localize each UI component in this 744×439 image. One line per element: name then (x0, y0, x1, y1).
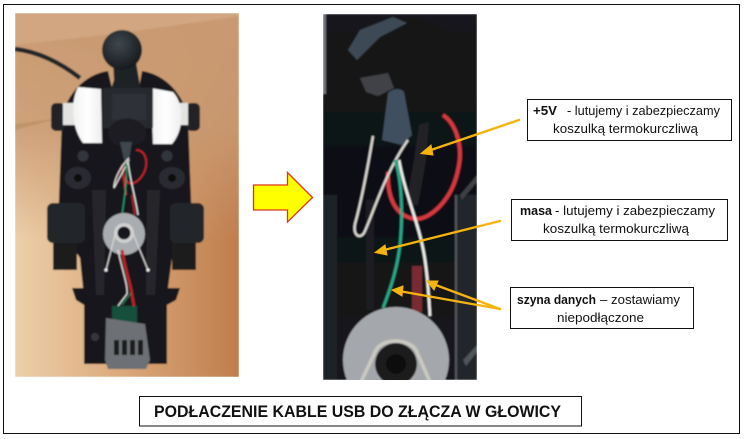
grey usb connector (105, 318, 150, 369)
label: +5V: - lutujemy i zabezpieczamy (567, 103, 720, 118)
photo: joystick head with wiring (15, 13, 239, 377)
label: masa: masa (520, 203, 553, 218)
label: masa: - lutujemy i zabezpieczamy (555, 203, 716, 218)
label: masa (512, 200, 728, 240)
title (140, 396, 582, 426)
annotation arrows (375, 120, 519, 309)
label: +5V (528, 100, 732, 140)
label: +5V: +5V (533, 103, 557, 118)
green wire (383, 160, 402, 308)
arrows to data lines (392, 281, 500, 309)
green circuit board (112, 306, 137, 323)
black heat-shrink tube (406, 122, 429, 205)
red sleeve (412, 266, 422, 312)
left white wire loop (355, 136, 408, 236)
washer with spring (342, 306, 450, 380)
coloured wires (114, 150, 146, 215)
wooden table background (15, 13, 239, 377)
red wire loop (388, 115, 460, 219)
label: szyna danych: – zostawiamy (600, 292, 681, 307)
wires to connector (118, 250, 134, 306)
label: masa: koszulką termokurczliwą (543, 221, 690, 236)
usb cable (15, 49, 80, 78)
cable sleeve (382, 89, 412, 145)
joystick housing (47, 71, 204, 364)
dark background (323, 14, 477, 380)
label: szyna danych (510, 288, 694, 328)
label: szyna danych: szyna danych (517, 292, 596, 307)
grey washer with spring (103, 213, 150, 272)
white wire (399, 160, 430, 316)
white rollers (63, 87, 188, 144)
title: PODŁACZENIE KABLE USB DO ZŁĄCZA W GŁOWICY (154, 403, 561, 421)
arrow to masa (375, 221, 500, 255)
label: szyna danych: niepodłączone (557, 310, 644, 325)
arrow to +5V (421, 120, 519, 155)
photo: wiring close-up (323, 14, 477, 413)
rubber cap (348, 16, 407, 96)
label: +5V: koszulką termokurczliwą (553, 121, 699, 136)
yellow arrow (254, 172, 312, 222)
stick with ball grip (102, 30, 153, 160)
